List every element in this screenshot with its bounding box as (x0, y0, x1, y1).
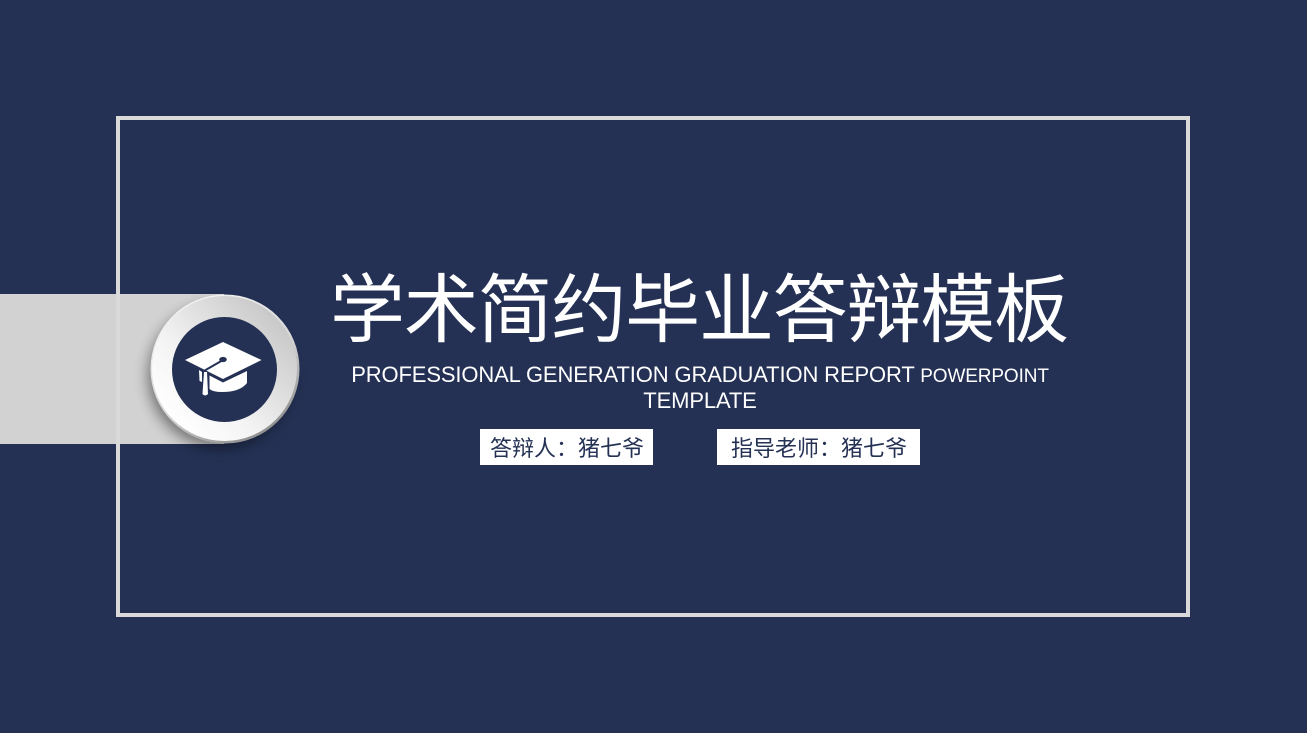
outer frame (116, 116, 1190, 617)
subtitle: PROFESSIONAL GENERATION GRADUATION REPORT POWERPOINT (351, 362, 1049, 387)
badge ring (152, 296, 297, 441)
advisor tag: 指导老师：猪七爷 (731, 436, 907, 461)
presenter tag: 答辩人：猪七爷 (490, 436, 644, 461)
gray band (0, 294, 224, 444)
presenter tag (480, 429, 653, 465)
icon: cap (185, 342, 262, 396)
badge rim (150, 294, 300, 444)
title: 学术简约毕业答辩模板 (330, 268, 1068, 352)
subtitle: TEMPLATE (643, 388, 757, 413)
icon: graduation cap badge (139, 294, 300, 453)
badge centre (172, 317, 277, 422)
subtitle (351, 362, 1049, 413)
advisor tag (717, 429, 920, 465)
badge shadow (148, 304, 292, 448)
